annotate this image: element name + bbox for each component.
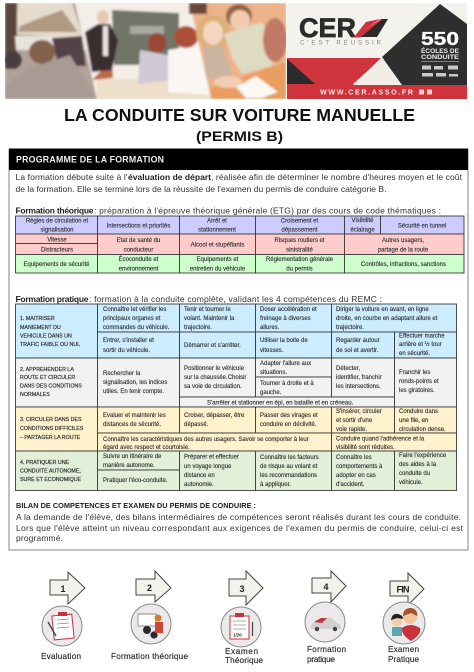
competence 2: DANS DES CONDITIONS [20, 384, 82, 390]
competence 4: Suivre un itinéraire de [103, 454, 162, 460]
competence 3: CONDITIONS DIFFICILES [20, 426, 84, 432]
competence 4: 4. PRATIQUER UNE [20, 460, 70, 466]
row: vehicle and regulation: Equipements et [197, 257, 239, 263]
competence 4: comportements à [336, 464, 383, 470]
competence 4: manière autonome. [103, 463, 155, 469]
competence 4: véhicule. [399, 480, 423, 486]
competence 4: à appliquer. [260, 482, 291, 488]
competence 1: Doser accélération et [260, 307, 317, 313]
competence 4: les recommandations [260, 473, 317, 479]
panel heading: PROGRAMME DE LA FORMATION [16, 154, 164, 164]
competence 3 [16, 407, 456, 451]
banner: CER logo panel [286, 3, 467, 99]
row: rules of the road: Sécurité en tunnel [398, 224, 446, 230]
label: examen théorique: Théorique [225, 656, 263, 665]
competence 2: sa voie de circulation. [184, 384, 242, 390]
competence 2: ROUTE ET CIRCULER [20, 375, 75, 381]
competence 1: 1. MAITRISER [20, 316, 55, 322]
icon: exam sheet: 1/20 [233, 632, 242, 638]
competence 1: Démarrer et s'arrêter. [184, 343, 241, 349]
competence 4: Connaître les facteurs [260, 455, 319, 461]
competence 1: trajectoire. [184, 325, 212, 331]
550 schools text [421, 29, 459, 62]
competence 1: MANIEMENT DU [20, 325, 61, 331]
competence 4: distance en [184, 473, 215, 479]
intro text [16, 172, 463, 194]
competence 1: de soi et avertir. [336, 348, 379, 354]
bilan de compétences: A la demande de l'élève, des bilans intermédiaires de compétences seront réalisés durant les cours de conduite. [16, 512, 461, 522]
label: formation pratique: Formation [307, 645, 346, 654]
row: rules of the road: signalisation [40, 228, 74, 234]
website address: WWW.CER.ASSO.FR [320, 88, 414, 96]
competence 2: Franchir les [399, 370, 430, 376]
competence 2: Positionner le véhicule [184, 366, 245, 372]
title [64, 105, 415, 144]
label: formation théorique: Formation théorique [111, 652, 188, 661]
icon: classroom [131, 604, 171, 644]
competence 3: Croiser, dépasser, être [184, 413, 245, 419]
competence 2: Tourner à droite et à [260, 381, 314, 387]
competence 1: en sécurité. [399, 351, 430, 357]
row: rules of the road: Croisement et [281, 218, 319, 224]
dark house shape [382, 4, 467, 85]
competence 3: égard avec respect et courtoisie. [103, 445, 190, 451]
arrow 3: 3 [239, 584, 245, 594]
competence 1: vitesses. [260, 348, 284, 354]
competence 4: d'accident. [336, 482, 365, 488]
competence 1: sortir du véhicule. [103, 348, 150, 354]
row: road behaviour: partage de la route [378, 248, 429, 254]
row: road behaviour: conducteur [124, 248, 153, 254]
label: examen théorique [225, 647, 263, 665]
competence 4: Préparer et effectuer [184, 454, 239, 460]
row: rules of the road [16, 216, 464, 234]
row: vehicle and regulation [16, 254, 464, 273]
competence 2: gauche. [260, 390, 282, 396]
competence 3: circulation dense. [399, 427, 446, 433]
550 schools text: 550 [421, 29, 459, 49]
competence 1 [16, 304, 456, 358]
competence 4: Faire l'expérience [399, 453, 447, 459]
row: road behaviour: Alcool et stupéfiants [191, 242, 244, 248]
competence 4: de risque au volant et [260, 464, 318, 470]
competence 1: freinage à diverses [260, 316, 311, 322]
logo: CER wordmark: CER [299, 13, 356, 43]
row: road behaviour: Autres usagers, [382, 238, 424, 244]
competence 3: Passer des virages et [260, 413, 318, 419]
step 3: examen théorique [221, 571, 263, 665]
label: examen pratique: Pratique [388, 655, 419, 664]
competence 1: commandes du véhicule. [103, 325, 170, 331]
row: vehicle and regulation: entretien du véhicule [190, 266, 246, 272]
competence 1: Diriger la voiture en avant, en ligne [336, 307, 429, 313]
competence 3: S'insérer, circuler [336, 409, 382, 415]
competence 4 [16, 451, 456, 490]
competence 1: Regarder autour [336, 338, 380, 344]
label: examen pratique: Examen [388, 645, 419, 654]
competence 1: Effectuer marche [399, 334, 445, 340]
bilan de compétences: programmé. [16, 533, 63, 543]
step 1: evaluation [41, 572, 85, 661]
logo: red check mark [354, 19, 388, 37]
bilan de compétences: Lors que l'élève atteint un niveau correspondant aux exigences de l'examen du permis de conduire, celui-ci est [16, 523, 464, 533]
table: practical skills [16, 304, 456, 490]
row: road behaviour: Distracteurs [41, 248, 73, 254]
competence 3: Evaluer et maintenir les [103, 413, 166, 419]
row: road behaviour: sinistralité [286, 248, 313, 254]
logo: tagline: C'EST RÉUSSIR [300, 40, 382, 46]
row: vehicle and regulation: Écoconduite et [119, 256, 159, 263]
title: LA CONDUITE SUR VOITURE MANUELLE [64, 105, 415, 125]
banner: photo collage [4, 3, 287, 99]
competence 3: et sortir d'une [336, 418, 373, 424]
bilan de compétences [16, 501, 464, 543]
arrow 4: 4 [323, 582, 329, 592]
row: rules of the road: éclairage [350, 228, 375, 234]
step 5: examen pratique [383, 573, 425, 664]
arrow 1: 1 [60, 584, 66, 594]
competence 2: signalisation, les indices [103, 380, 167, 386]
competence 4: des aides à la [399, 462, 437, 468]
competence 1: TRAFIC FAIBLE OU NUL [20, 342, 80, 348]
competence 3: 3. CIRCULER DANS DES [20, 417, 82, 423]
competence 3: visibilité sont réduites. [336, 445, 395, 451]
competence 3: – PARTAGER LA ROUTE [20, 435, 81, 441]
icon: car [305, 602, 345, 642]
competence 2: Rechercher la [103, 371, 141, 377]
competence 4: Pratiquer l'éco-conduite. [103, 478, 168, 484]
competence 1: arrière et ½ tour [399, 341, 442, 348]
competence 1: Connaître let vérifier les [103, 307, 166, 313]
competence 4: un voyage longue [184, 464, 232, 470]
competence 2: S'arrêter et stationner en épi, en bataille et en créneau. [207, 400, 354, 406]
competence 1: Entrer, s'installer et [103, 338, 154, 344]
table: theory courses [16, 216, 464, 273]
title: (PERMIS B) [196, 128, 283, 144]
competence 3: Conduire quand l'adhérence et la [336, 436, 425, 442]
row: road behaviour: Risques routiers et [274, 238, 325, 244]
row: road behaviour: Etat de santé du [117, 238, 160, 244]
550 schools text: CONDUITE [421, 55, 459, 61]
panel: programme de la formation [9, 148, 468, 550]
competence 1: allures. [260, 325, 280, 331]
competence 2: identifier, franchir [336, 375, 382, 381]
label: evaluation: Evaluation [41, 652, 81, 661]
heading: formation théorique: : préparation à l'épreuve théorique générale (ETG) par des cours de code thématiques : [94, 206, 441, 216]
step 4: formation pratique [305, 571, 346, 664]
icon: clipboard [42, 606, 82, 646]
row: vehicle and regulation: environnement [119, 266, 159, 272]
competence 2: NORMALES [20, 392, 50, 398]
competence 2: 2. APPREHENDER LA [20, 367, 74, 373]
row: vehicle and regulation: Equipements de sécurité [23, 262, 90, 268]
vehicle pictograms [422, 66, 458, 76]
icon: couple [383, 602, 425, 644]
550 schools text: ÉCOLES DE [421, 47, 459, 55]
competence 2: ronds-points et [399, 379, 439, 385]
competence 4: autonomie. [184, 482, 214, 488]
competence 2: Détecter, [336, 366, 360, 372]
competence 1: principaux organes et [103, 316, 161, 322]
label: formation pratique: pratique [307, 655, 335, 664]
competence 3: une file, en [399, 418, 428, 424]
competence 4: Connaître les [336, 455, 372, 461]
red band with triangles [287, 58, 467, 99]
row: vehicle and regulation: Contrôles, infractions, sanctions [361, 262, 446, 268]
label: examen théorique: Examen [225, 647, 258, 656]
competence 4: SURE ET ECONOMIQUE [20, 477, 82, 483]
competence 1: volant. Maintenir la [184, 316, 235, 322]
row: vehicle and regulation: du permis [286, 266, 313, 272]
heading: formation théorique: Formation théorique [16, 206, 94, 216]
intro text: , réalisée afin de déterminer le nombre d'heures moyen et le coût [211, 172, 463, 182]
competence 4: CONDUITE AUTONOME, [20, 468, 81, 474]
row: road behaviour [16, 234, 464, 254]
competence 4: adopter en cas [336, 473, 376, 479]
competence 3: Connaître les caractéristiques des autres usagers. Savoir se comporter à leur [103, 437, 309, 443]
competence 4: conduite du [399, 471, 430, 477]
row: rules of the road: stationnement [198, 228, 236, 234]
competence 1: trajectoire. [336, 325, 364, 331]
competence 2: les intersections. [336, 384, 381, 390]
competence 3: voie rapide. [336, 427, 367, 433]
row: rules of the road: Intersections et priorités [107, 224, 170, 230]
competence 2: les giratoires. [399, 388, 435, 394]
label: formation pratique [307, 645, 346, 664]
competence 2: utiles. En tenir compte. [103, 389, 164, 395]
intro text: évaluation de départ [128, 172, 211, 182]
competence 3: conduire en déclivité. [260, 422, 317, 428]
row: road behaviour: Vitesse [47, 238, 67, 244]
competence 2: situations. [260, 370, 287, 376]
competence 1: Tenir et tourner le [184, 307, 231, 313]
row: rules of the road: Visibilité [352, 218, 374, 224]
row: rules of the road: Règles de circulation et [26, 218, 89, 224]
step 2: formation théorique [111, 571, 188, 661]
arrow fin: FIN [396, 584, 410, 594]
competence 1: Utiliser la boite de [260, 338, 308, 344]
competence 3: distances de sécurité. [103, 422, 161, 428]
competence 2 [16, 358, 456, 407]
competence 1: droite, en courbe en adaptant allure et [336, 316, 438, 322]
label: examen pratique [388, 645, 419, 664]
competence 3: Conduire dans [399, 409, 438, 415]
competence 2: Adapter l'allure aux [260, 361, 311, 367]
row: rules of the road: dépassement [281, 228, 318, 234]
heading: formation pratique: : formation à la conduite complète, validant les 4 compétences du REMC : [89, 294, 382, 304]
competence 2: sur la chaussée.Choisir [184, 375, 246, 381]
intro text: de la formation. Elle se termine lors de la réussite de l'examen du permis de conduire catégorie B. [16, 184, 386, 194]
bilan de compétences: BILAN DE COMPETENCES ET EXAMEN DU PERMIS DE CONDUIRE : [16, 501, 256, 510]
competence 3: dépassé. [184, 422, 209, 428]
row: vehicle and regulation: Réglementation générale [266, 257, 334, 263]
competence 1: VEHICULE DANS UN [20, 334, 72, 340]
row: rules of the road: Arrêt et [207, 218, 227, 224]
arrow 2: 2 [147, 583, 152, 593]
heading: formation pratique: Formation pratique [16, 294, 89, 304]
social icons [419, 90, 432, 94]
intro text: La formation débute suite à l' [16, 172, 128, 182]
